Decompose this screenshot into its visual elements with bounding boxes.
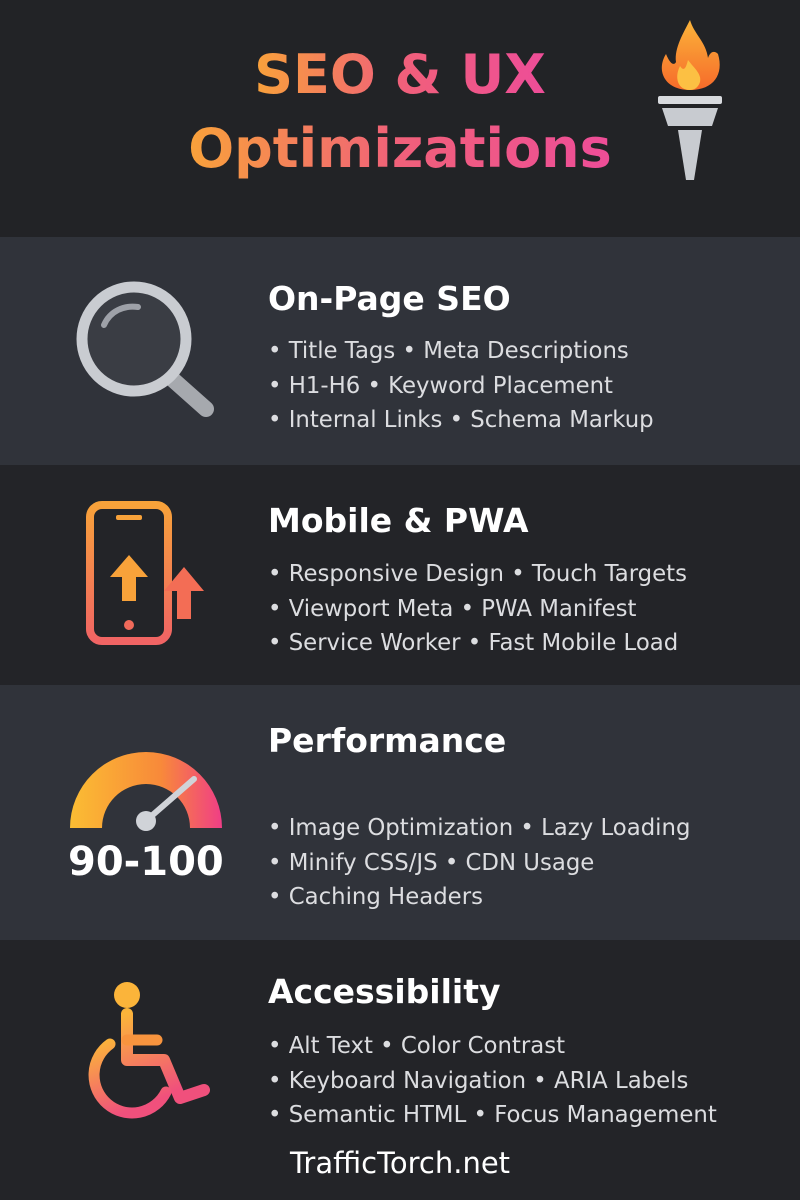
icon: torch bbox=[658, 20, 722, 180]
heading: Performance bbox=[268, 721, 506, 760]
footer: TrafficTorch.net bbox=[290, 1146, 510, 1180]
bullets bbox=[268, 338, 654, 433]
bullets: • Keyboard Navigation • ARIA Labels bbox=[268, 1068, 688, 1094]
icon: wheelchair bbox=[88, 982, 210, 1118]
bullets: • Internal Links • Schema Markup bbox=[268, 407, 654, 433]
panel: on-page seo bbox=[0, 237, 800, 465]
title bbox=[188, 43, 612, 180]
heading: On-Page SEO bbox=[268, 279, 511, 318]
heading: Accessibility bbox=[268, 972, 500, 1011]
bullets: • Caching Headers bbox=[268, 884, 483, 910]
title: Optimizations bbox=[188, 117, 612, 180]
panel: performance bbox=[0, 685, 800, 940]
bullets bbox=[268, 1033, 717, 1128]
bullets bbox=[268, 815, 690, 910]
value: score: 90-100 bbox=[68, 839, 224, 885]
heading: Mobile & PWA bbox=[268, 501, 529, 540]
header bbox=[0, 0, 800, 237]
bullets bbox=[268, 561, 687, 656]
bullets: • H1-H6 • Keyword Placement bbox=[268, 372, 613, 398]
bullets: • Alt Text • Color Contrast bbox=[268, 1033, 565, 1059]
bullets: • Service Worker • Fast Mobile Load bbox=[268, 630, 678, 656]
bullets: • Viewport Meta • PWA Manifest bbox=[268, 596, 636, 622]
bullets: • Semantic HTML • Focus Management bbox=[268, 1102, 717, 1128]
bullets: • Image Optimization • Lazy Loading bbox=[268, 815, 690, 841]
panel: mobile & pwa bbox=[0, 465, 800, 685]
icon: magnifier bbox=[76, 282, 214, 417]
title: SEO & UX bbox=[254, 43, 546, 106]
bullets: • Minify CSS/JS • CDN Usage bbox=[268, 850, 594, 876]
icon: gauge bbox=[70, 752, 222, 831]
icon: phone bbox=[86, 501, 204, 645]
bullets: • Title Tags • Meta Descriptions bbox=[268, 338, 629, 364]
bullets: • Responsive Design • Touch Targets bbox=[268, 561, 687, 587]
panel: accessibility bbox=[0, 940, 800, 1200]
